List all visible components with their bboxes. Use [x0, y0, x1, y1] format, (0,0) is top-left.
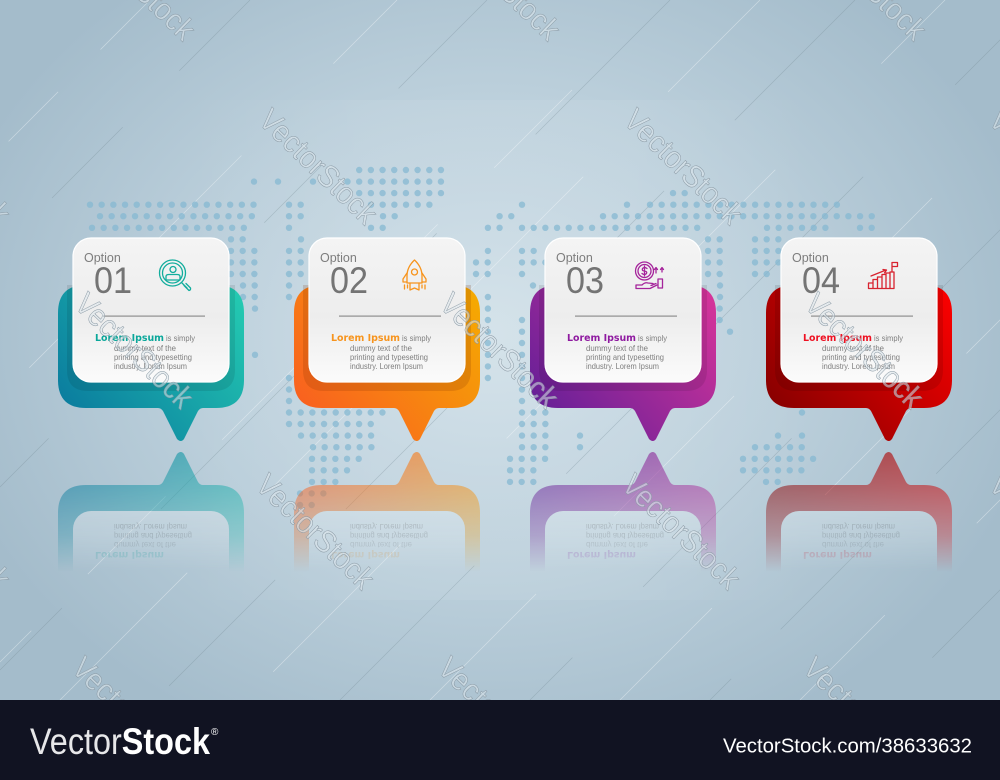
- text 02: industry. Lorem Ipsum: [350, 361, 423, 371]
- text 02: printing and typesetting: [350, 352, 428, 362]
- reflection: option 01: [58, 452, 244, 565]
- reflection: option 03: printing and typesetting: [586, 531, 664, 541]
- watermarks: VectorStock: [617, 102, 750, 232]
- bubble 02: [294, 285, 480, 441]
- text 01: Lorem Ipsum: [95, 333, 164, 344]
- text 01: printing and typesetting: [114, 352, 192, 362]
- number 02: 02: [330, 260, 368, 301]
- watermarks: VectorStock: [798, 286, 931, 416]
- reflection: option 04: industry. Lorem Ipsum: [822, 522, 895, 532]
- panel: option 02: [294, 238, 480, 441]
- reflection: option 04: printing and typesetting: [822, 531, 900, 541]
- card shadow 01: [67, 285, 235, 391]
- text 02: Lorem Ipsum: [331, 333, 400, 344]
- reflection: option 03: Lorem Ipsum: [567, 549, 636, 560]
- reflection: option 04: dummy text of the: [822, 540, 884, 550]
- label 04: Option: [792, 251, 829, 265]
- text 04: dummy text of the: [822, 343, 884, 353]
- watermarks: VectorStock: [68, 286, 201, 416]
- white card 03: [545, 238, 701, 382]
- number 03: 03: [566, 260, 604, 301]
- divider 04: [811, 316, 913, 317]
- text 04: [803, 333, 904, 371]
- text 03: printing and typesetting: [586, 352, 664, 362]
- number 01: 01: [94, 260, 132, 301]
- footer url: VectorStock.com/38633632: [723, 736, 972, 758]
- text 04: industry. Lorem Ipsum: [822, 361, 895, 371]
- text 03: is simply: [638, 333, 668, 343]
- number 04: 04: [802, 260, 840, 301]
- text 02: [331, 333, 432, 371]
- panel: option 03: [530, 238, 716, 441]
- card shadow 03: [539, 285, 707, 391]
- text 01: is simply: [166, 333, 196, 343]
- reflection: option 01: printing and typesetting: [114, 531, 192, 541]
- reflection: option 03: industry. Lorem Ipsum: [586, 522, 659, 532]
- white card 02: [309, 238, 465, 382]
- reflection: option 01: dummy text of the: [114, 540, 176, 550]
- white card 01: [73, 238, 229, 382]
- text 01: industry. Lorem Ipsum: [114, 361, 187, 371]
- text 04: printing and typesetting: [822, 352, 900, 362]
- reflection: option 01: Lorem Ipsum: [95, 549, 164, 560]
- card shadow 02: [303, 285, 471, 391]
- footer bar: [0, 700, 1000, 780]
- bubble 01: [58, 285, 244, 441]
- reflection: option 03: dummy text of the: [586, 540, 648, 550]
- text 03: industry. Lorem Ipsum: [586, 361, 659, 371]
- text 04: is simply: [874, 333, 904, 343]
- label 02: Option: [320, 251, 357, 265]
- reflection: option 02: industry. Lorem Ipsum: [350, 522, 423, 532]
- label 03: Option: [556, 251, 593, 265]
- icon: rocket: [403, 260, 426, 290]
- bubble 03: [530, 285, 716, 441]
- reflection: option 03: [530, 452, 716, 566]
- reflection: option 02: printing and typesetting: [350, 531, 428, 541]
- text 03: Lorem Ipsum: [567, 333, 636, 344]
- world map dots: [90, 170, 873, 505]
- text 01: dummy text of the: [114, 343, 176, 353]
- divider 03: [575, 316, 677, 317]
- panel: option 01: [58, 238, 244, 441]
- text 03: dummy text of the: [586, 343, 648, 353]
- registered mark: ®: [211, 727, 219, 738]
- icon: magnifier with person: [160, 260, 191, 290]
- reflection: option 04: Lorem Ipsum: [803, 549, 872, 560]
- icon: rising bars and flag: [868, 262, 898, 288]
- reflection: option 01: industry. Lorem Ipsum: [114, 522, 187, 532]
- divider 02: [339, 316, 441, 317]
- icon: coin over hand with arrows: [636, 262, 664, 288]
- reflection: option 02: Lorem Ipsum: [331, 549, 400, 560]
- watermarks: VectorStock: [615, 467, 748, 597]
- bubble 04: [766, 285, 952, 441]
- white card 04: [781, 238, 937, 382]
- label 01: Option: [84, 251, 121, 265]
- reflection: option 02: [294, 452, 480, 567]
- watermarks: VectorStock: [433, 286, 566, 416]
- footer logo: VectorStock: [30, 721, 210, 762]
- text 03: [567, 333, 668, 371]
- reflection: option 04: [766, 452, 952, 567]
- text 02: dummy text of the: [350, 343, 412, 353]
- text 02: is simply: [402, 333, 432, 343]
- text 04: Lorem Ipsum: [803, 333, 872, 344]
- panel: option 04: [766, 238, 952, 441]
- card shadow 04: [775, 285, 943, 391]
- watermarks: VectorStock: [249, 467, 382, 597]
- divider 01: [103, 316, 205, 317]
- text 01: [95, 333, 196, 371]
- watermarks: VectorStock: [252, 102, 385, 232]
- reflection: option 02: dummy text of the: [350, 540, 412, 550]
